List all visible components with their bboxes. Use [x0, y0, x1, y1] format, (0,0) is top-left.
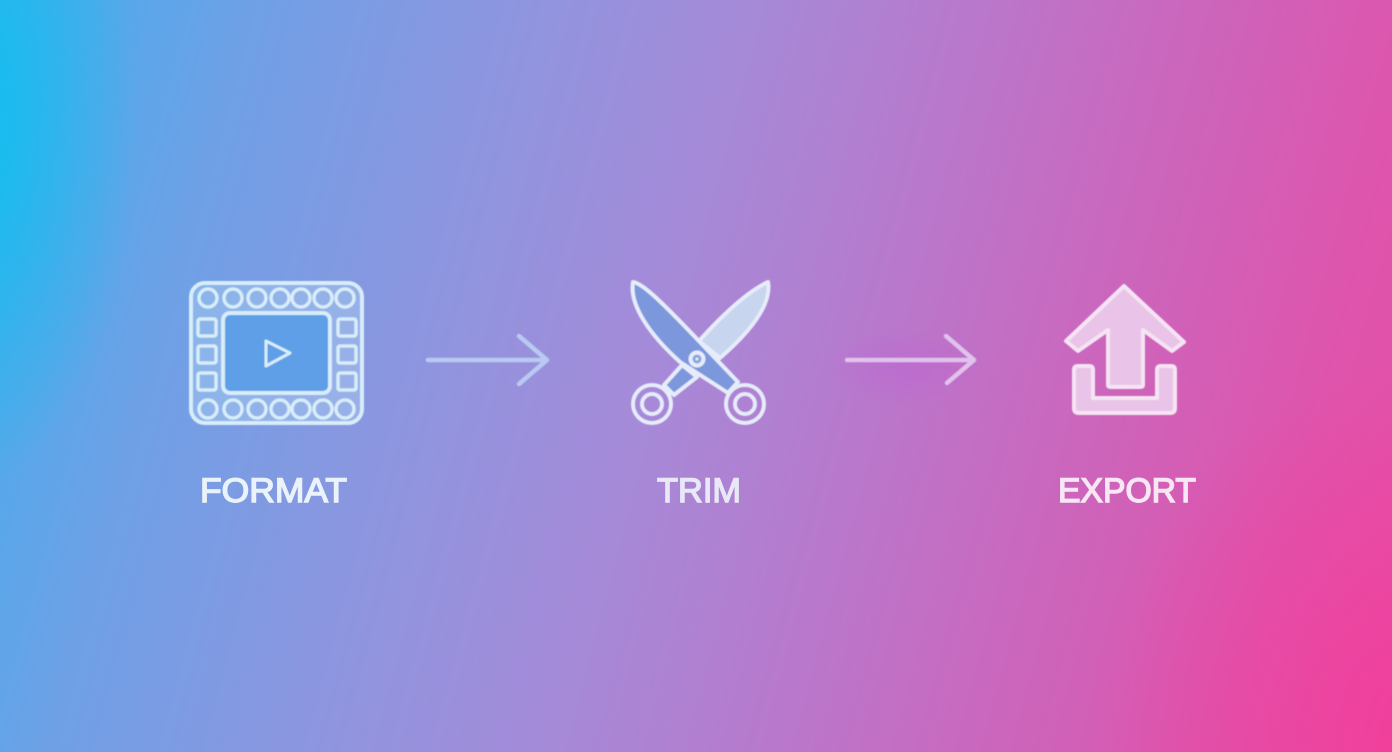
icon: scissors: [633, 282, 768, 423]
arrow: format to trim: [428, 336, 547, 384]
arrow: trim to export: [847, 336, 974, 383]
label: TRIM: TRIM: [657, 472, 741, 510]
icon: film strip with play button: [191, 283, 362, 423]
label: EXPORT: EXPORT: [1058, 472, 1196, 510]
icon: export upload arrow and tray: [1066, 286, 1184, 413]
label: FORMAT: FORMAT: [200, 472, 347, 510]
